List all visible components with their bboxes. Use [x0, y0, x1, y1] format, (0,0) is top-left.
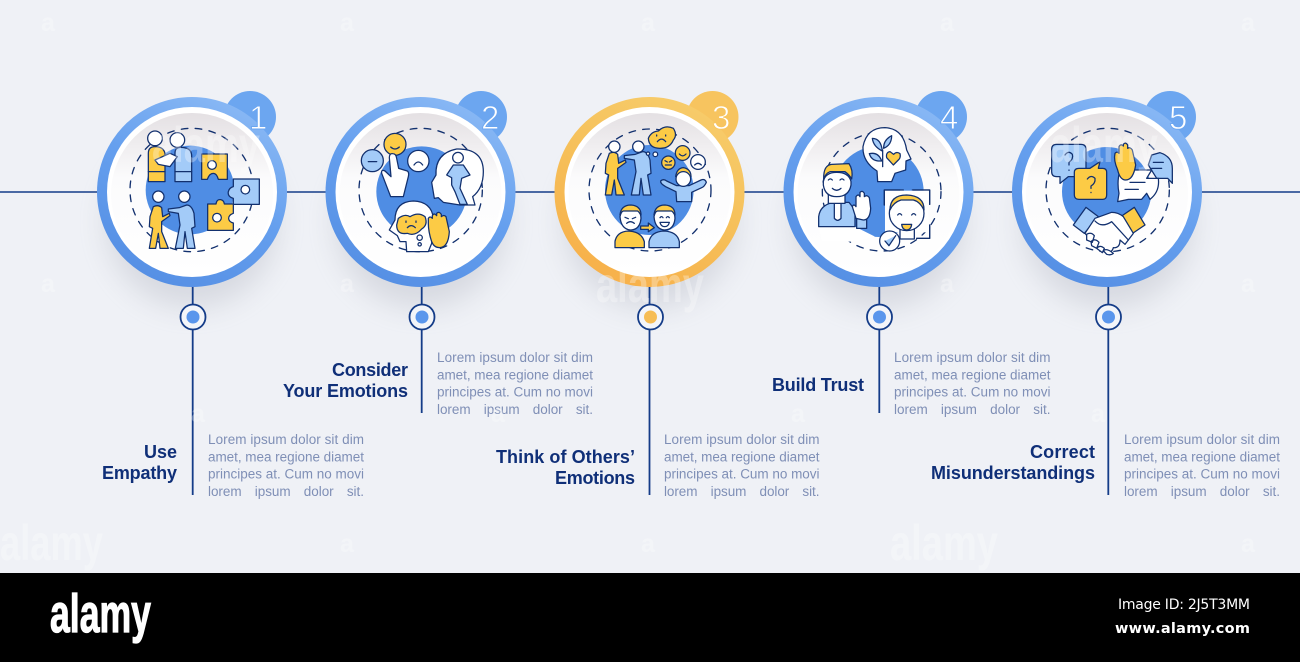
step 1	[97, 91, 364, 499]
node 2	[410, 304, 434, 330]
watermarks: a	[940, 270, 955, 298]
heading: Consider Your Emotions: Your Emotions	[283, 381, 408, 401]
watermarks: a	[340, 9, 355, 37]
ring 1 with badge	[97, 91, 287, 287]
watermarks: a	[340, 530, 355, 558]
heading: Consider Your Emotions	[283, 360, 408, 401]
node 4	[867, 304, 892, 330]
ring 4 with badge: 4	[940, 99, 958, 136]
heading: Correct Misunderstandings: Misunderstandings	[931, 463, 1095, 483]
watermarks: a	[641, 9, 656, 37]
node 1	[180, 304, 206, 330]
text block 4: lorem ipsum dolor sit.	[894, 402, 1050, 417]
watermarks: alamy	[596, 257, 704, 313]
text block 2: Lorem ipsum dolor sit dim	[437, 350, 593, 365]
ring 3 with badge: 3	[712, 99, 730, 136]
icon: teamwork and puzzle pieces	[130, 128, 259, 252]
text block 1: amet, mea regione diamet	[208, 450, 364, 464]
ring 5 with badge	[1012, 91, 1202, 287]
node 3	[638, 304, 663, 330]
heading: Think of Others' Emotions: Think of Others’	[496, 447, 635, 467]
icon: other people's emotions	[589, 127, 711, 251]
text block 5: Lorem ipsum dolor sit dim	[1124, 432, 1280, 447]
text block 2	[437, 350, 593, 417]
text block 2: amet, mea regione diamet	[437, 368, 593, 382]
text block 1: lorem ipsum dolor sit.	[208, 484, 364, 499]
ring 4 with badge	[784, 91, 974, 287]
heading: Correct Misunderstandings: Correct	[1030, 442, 1095, 462]
ring 5 with badge: 5	[1169, 99, 1187, 136]
text block 4	[894, 350, 1051, 417]
ring 2 with badge: 2	[481, 99, 499, 136]
step 3	[496, 91, 820, 499]
watermarks: a	[491, 400, 506, 428]
ring 3 with badge	[554, 91, 744, 287]
watermarks: alamy	[890, 515, 998, 571]
heading: Build Trust: Build Trust	[772, 375, 864, 395]
website: www.alamy.com	[1115, 621, 1250, 637]
watermarks: alamy	[1050, 117, 1158, 173]
heading: Correct Misunderstandings	[931, 442, 1095, 483]
step 4	[772, 91, 1051, 417]
watermarks: a	[1241, 530, 1256, 558]
watermarks: alamy	[0, 515, 103, 571]
text block 5	[1124, 432, 1280, 499]
watermarks: a	[1091, 400, 1106, 428]
heading: Use Empathy: Empathy	[102, 463, 177, 483]
heading: Think of Others' Emotions: Emotions	[555, 468, 635, 488]
text block 5: principes at. Cum no movi	[1124, 466, 1280, 482]
text block 1: principes at. Cum no movi	[208, 466, 364, 482]
horizontal timeline	[0, 191, 1300, 193]
icon: building trust	[819, 128, 941, 251]
watermarks: a	[1241, 9, 1256, 37]
text block 1	[208, 432, 364, 499]
text block 5: amet, mea regione diamet	[1124, 450, 1280, 464]
watermarks: a	[340, 270, 355, 298]
text block 5: lorem ipsum dolor sit.	[1124, 484, 1280, 499]
watermarks: a	[191, 400, 206, 428]
watermarks: a	[940, 9, 955, 37]
text block 3	[664, 432, 820, 499]
footer bar	[0, 573, 1300, 662]
text block 2: lorem ipsum dolor sit.	[437, 402, 593, 417]
text block 4: amet, mea regione diamet	[894, 368, 1051, 382]
alamy logo: alamy	[50, 584, 151, 644]
heading: Use Empathy	[102, 442, 177, 483]
heading: Think of Others' Emotions	[496, 447, 635, 488]
text block 4: Lorem ipsum dolor sit dim	[894, 350, 1050, 365]
step 5	[931, 91, 1280, 499]
watermarks: a	[41, 270, 56, 298]
icon: resolving misunderstandings	[1046, 128, 1172, 255]
watermarks: alamy	[152, 117, 260, 173]
text block 1: Lorem ipsum dolor sit dim	[208, 432, 364, 447]
text block 4: principes at. Cum no movi	[894, 384, 1050, 400]
ring 1 with badge: 1	[249, 99, 267, 136]
heading: Use Empathy: Use	[144, 442, 177, 462]
watermarks: a	[791, 400, 806, 428]
heading: Consider Your Emotions: Consider	[332, 360, 408, 380]
text block 3: lorem ipsum dolor sit.	[664, 484, 820, 499]
icon: choosing emotions	[359, 128, 483, 252]
watermarks: a	[41, 9, 56, 37]
image id: Image ID: 2J5T3MM	[1118, 597, 1250, 613]
ring 2 with badge	[326, 91, 516, 287]
text block 3: amet, mea regione diamet	[664, 450, 820, 464]
text block 3: Lorem ipsum dolor sit dim	[664, 432, 820, 447]
step 2	[283, 91, 593, 417]
text block 2: principes at. Cum no movi	[437, 384, 593, 400]
text block 3: principes at. Cum no movi	[664, 466, 820, 482]
watermarks: a	[1241, 270, 1256, 298]
node 5	[1096, 304, 1121, 330]
watermarks: a	[641, 530, 656, 558]
